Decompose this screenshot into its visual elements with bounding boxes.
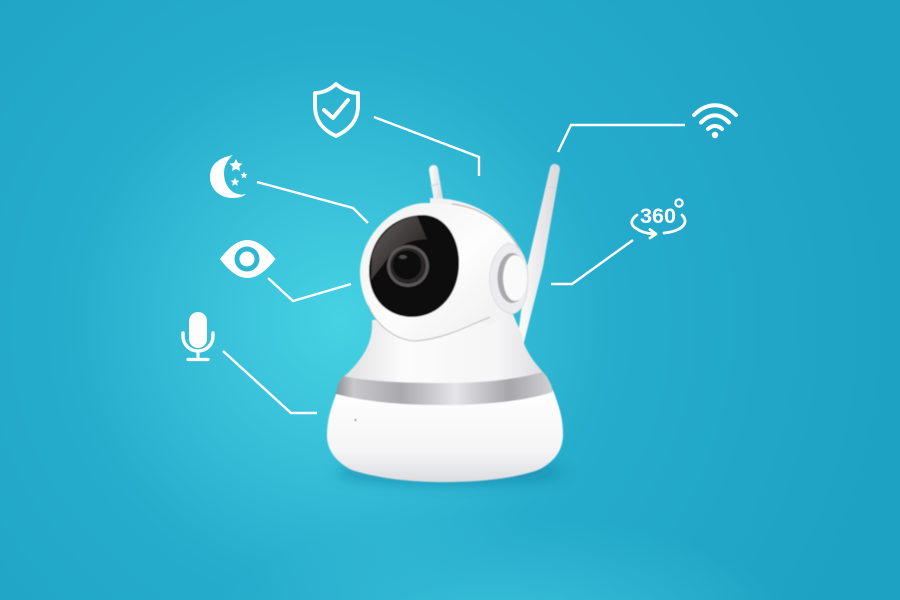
icon: shield with check: [315, 84, 358, 136]
base dome: [327, 390, 563, 482]
right antenna: [516, 164, 560, 350]
line: 360 to camera: [551, 240, 633, 284]
icon: microphone: [183, 312, 213, 360]
silver band: [336, 372, 553, 405]
side hinge knob: [490, 243, 528, 314]
icon: eye: [220, 240, 276, 278]
left antenna: [429, 165, 444, 208]
camera: [327, 164, 564, 484]
connector lines: [223, 117, 685, 413]
indicator dot: [354, 419, 356, 421]
lens: [387, 245, 429, 287]
line: shield to camera: [374, 117, 479, 176]
body neck: [340, 312, 548, 392]
line: eye to camera: [268, 278, 351, 301]
ground shadow: [336, 460, 564, 484]
housing glare: [371, 216, 427, 280]
back shell: [430, 198, 528, 325]
lens housing: [369, 215, 459, 317]
line: moon to camera: [257, 182, 368, 223]
icon: moon and stars: [210, 155, 248, 198]
line: wifi to camera: [558, 125, 685, 152]
head: [360, 203, 522, 342]
icon: 360 degree rotation: [632, 199, 685, 238]
icon label: 360: 360: [640, 205, 676, 228]
line: microphone to camera: [223, 351, 317, 413]
icon: wifi: [694, 105, 736, 138]
